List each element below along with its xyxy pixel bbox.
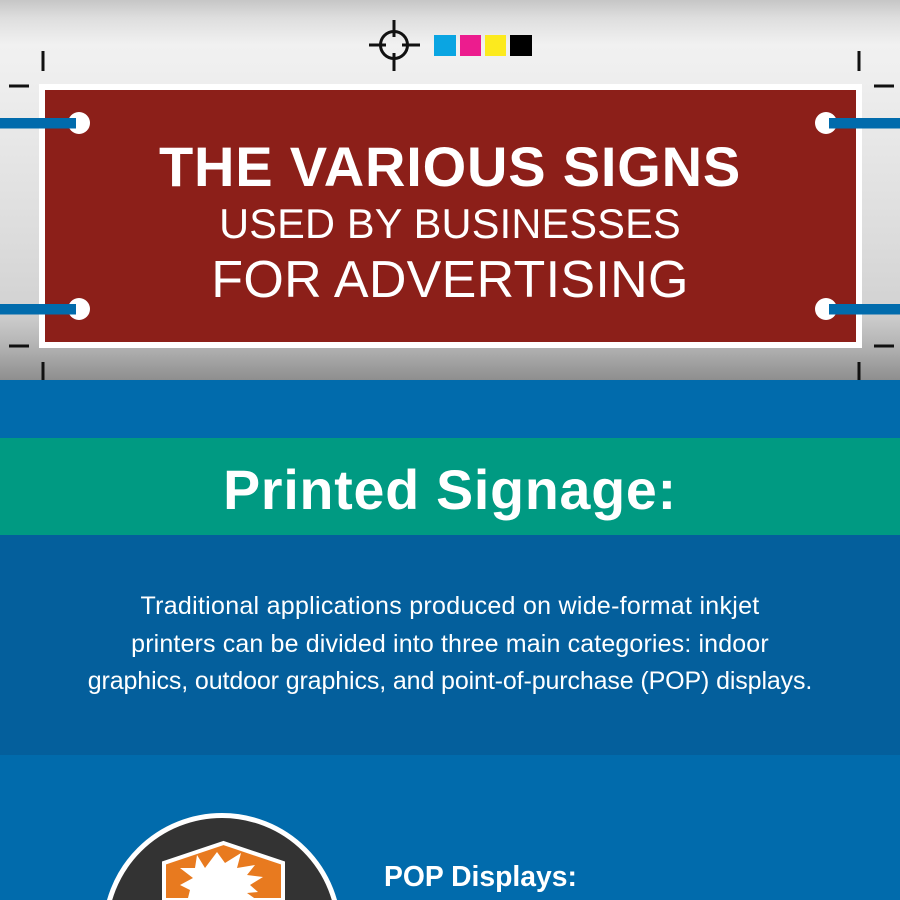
registration target (369, 20, 420, 71)
icon: POP display badge (107, 813, 337, 900)
printer marks (9, 20, 894, 380)
description panel: Traditional applications produced on wide-format inkjet (141, 592, 759, 620)
header background (0, 0, 900, 380)
title (159, 135, 741, 309)
sign panel (39, 84, 862, 348)
description panel: graphics, outdoor graphics, and point-of-purchase (POP) displays. (88, 667, 812, 695)
title: FOR ADVERTISING (211, 251, 689, 309)
colour swatches (434, 35, 532, 56)
description panel (0, 535, 900, 755)
description panel: printers can be divided into three main categories: indoor (131, 630, 769, 658)
section heading band: Printed Signage: (223, 459, 677, 521)
crop marks (9, 51, 894, 381)
sign grommets and straps (0, 112, 900, 320)
title: USED BY BUSINESSES (219, 200, 681, 247)
title: THE VARIOUS SIGNS (159, 135, 741, 198)
subheading: POP Displays: POP Displays: (384, 860, 577, 892)
section heading band (0, 438, 900, 535)
